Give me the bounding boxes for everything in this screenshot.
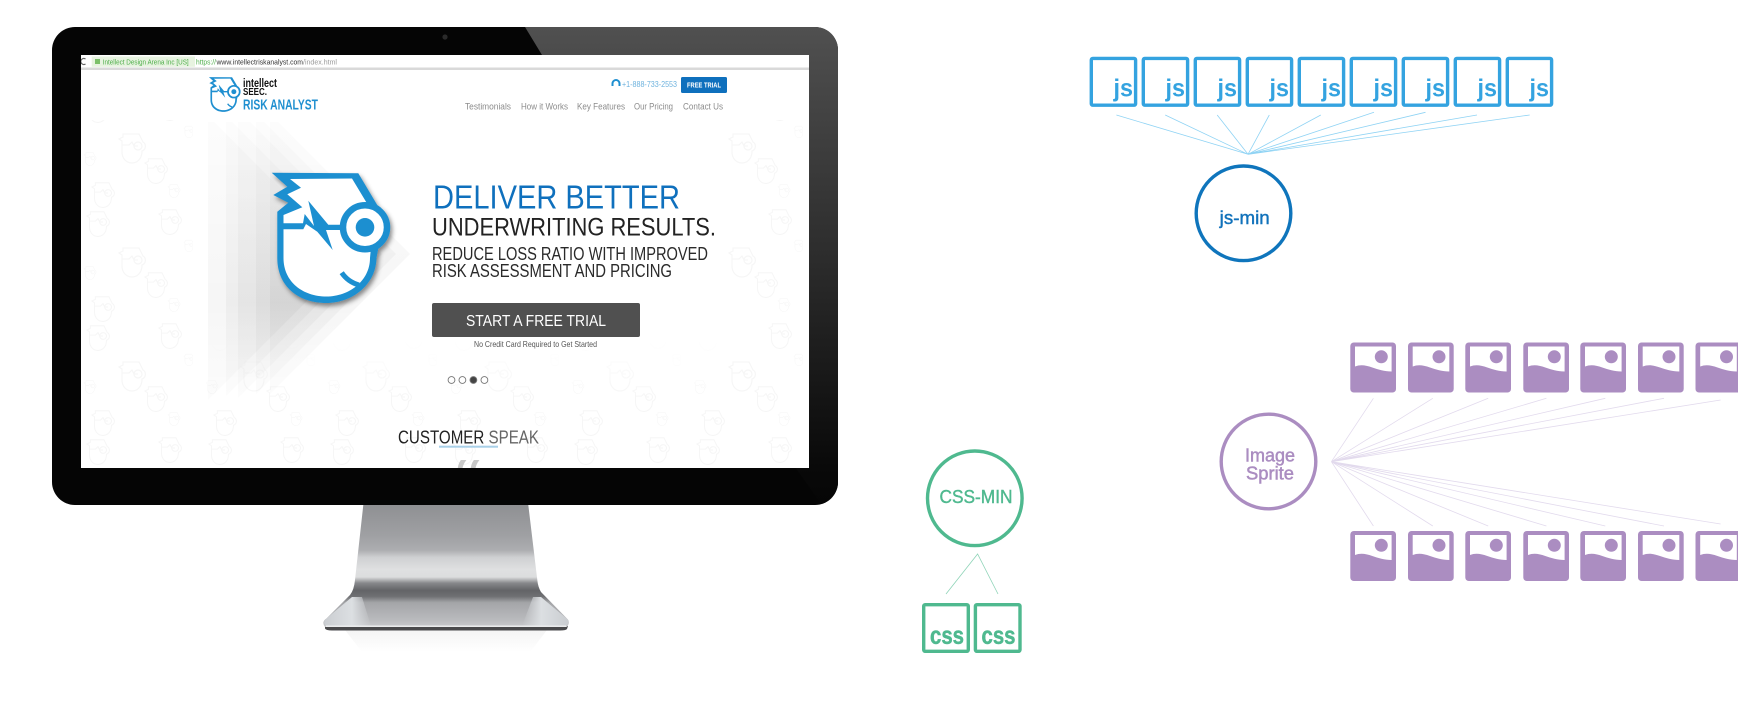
site logo: RISK ANALYST (243, 98, 318, 114)
navigation menu: Key Features (577, 102, 625, 112)
js file icons: js (1217, 74, 1237, 102)
site logo (209, 77, 318, 114)
css file icons: css (982, 622, 1016, 650)
quotation mark: “ (453, 448, 484, 517)
css file icons (924, 605, 1020, 651)
carousel dots (448, 377, 488, 383)
layered grey triangles (208, 142, 396, 377)
js file icons: js (1113, 74, 1133, 102)
navigation menu: Contact Us (683, 102, 723, 112)
image sprite circle (1221, 414, 1316, 509)
js file icons: js (1529, 74, 1549, 102)
website screenshot (81, 55, 809, 468)
hero headline (434, 186, 714, 236)
js-min circle (1196, 166, 1291, 261)
navigation menu: Our Pricing (634, 102, 673, 112)
js file icons: js (1373, 74, 1393, 102)
js-min circle: js-min (1219, 208, 1270, 228)
site logo: intellect (243, 78, 277, 90)
browser address bar: Intellect Design Arena Inc [US] (103, 58, 189, 66)
image icons bottom row (1350, 531, 1738, 581)
image sprite diagram (1221, 342, 1738, 581)
start free trial button: START A FREE TRIAL (466, 313, 606, 330)
hero subheading: REDUCE LOSS RATIO WITH IMPROVED (432, 244, 708, 264)
customer speak heading: CUSTOMER SPEAK (398, 428, 539, 448)
no credit card note: No Credit Card Required to Get Started (474, 339, 597, 349)
image sprite circle: Image (1245, 446, 1295, 466)
js file icons: js (1477, 74, 1497, 102)
mascot icon (272, 173, 387, 303)
hero subheading (433, 247, 708, 277)
background owl pattern (84, 120, 803, 465)
monitor (52, 27, 838, 652)
navigation menu: Testimonials (465, 102, 511, 112)
css-min circle (928, 451, 1022, 546)
image sprite circle: Sprite (1246, 464, 1294, 484)
css-min circle: CSS-MIN (940, 487, 1012, 507)
js file icons: js (1425, 74, 1445, 102)
browser address bar: www.intellectriskanalyst.com (216, 58, 303, 66)
browser address bar (81, 56, 809, 70)
site logo: SEEC. (243, 86, 267, 98)
start free trial button (432, 303, 640, 337)
js connector lines (1116, 112, 1530, 154)
browser address bar: /index.html (303, 58, 337, 66)
css minification diagram (924, 451, 1022, 651)
free trial button (681, 77, 727, 93)
navigation menu: How it Works (521, 102, 568, 112)
sprite connector lines (1331, 398, 1721, 526)
hero headline: DELIVER BETTER (433, 178, 680, 216)
monitor stand (323, 505, 569, 652)
logo mascot icon (209, 77, 240, 112)
hero headline: UNDERWRITING RESULTS. (432, 214, 716, 242)
phone number: +1-888-733-2553 (622, 80, 677, 89)
image icons top row (1350, 342, 1738, 392)
js file icons: js (1165, 74, 1185, 102)
css file icons: css (930, 622, 964, 650)
js file icons: js (1321, 74, 1341, 102)
monitor bezel (52, 27, 838, 505)
css connector lines (946, 554, 998, 594)
phone number (612, 79, 677, 87)
js file icons: js (1269, 74, 1289, 102)
navigation menu (465, 103, 723, 112)
js file icons (1091, 58, 1552, 105)
js minification diagram (1091, 58, 1552, 261)
free trial button: FREE TRIAL (687, 82, 722, 90)
hero subheading: RISK ASSESSMENT AND PRICING (432, 261, 672, 281)
browser address bar: https:// (196, 58, 217, 66)
